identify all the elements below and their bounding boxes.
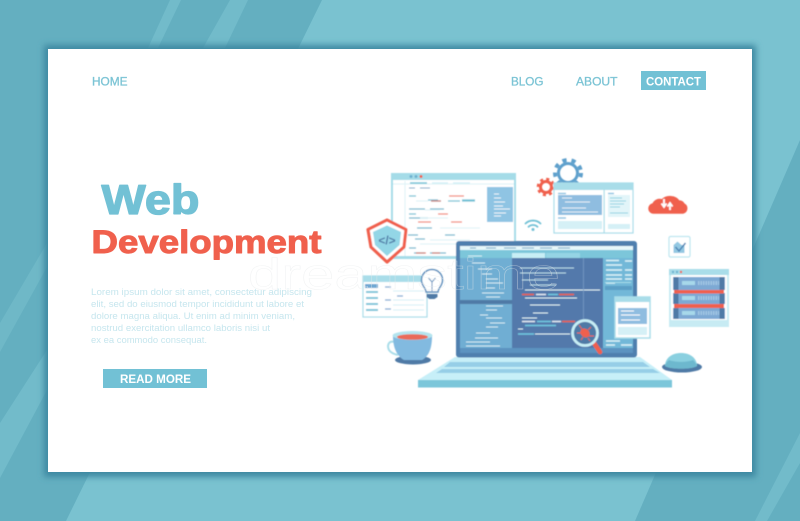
saucer: [395, 356, 431, 364]
icon: wifi: [526, 221, 540, 231]
right properties panel: [603, 258, 633, 348]
server rack window: [669, 269, 729, 327]
body text block: nostrud exercitation ullamco laboris nisi ut: [91, 323, 270, 334]
icon: blue gear: [555, 160, 581, 186]
icon: computer mouse: [662, 353, 702, 372]
body text block: dolore magna aliqua. Ut enim ad minim veniam,: [91, 311, 295, 322]
floating mini window: [615, 297, 650, 338]
body text block: [91, 287, 312, 346]
icon: coffee cup: [388, 331, 432, 364]
settings blue block: [558, 195, 602, 215]
browser bar: [460, 246, 633, 250]
icon: lightbulb: [422, 270, 442, 299]
nav: contact button: [641, 71, 706, 90]
code panel: [512, 258, 603, 348]
icon: cloud with sync arrows: [649, 197, 687, 213]
nav: about: ABOUT: [576, 76, 618, 88]
icon: checkbox: [669, 236, 690, 257]
small form window: [363, 276, 427, 317]
server units: [673, 277, 725, 319]
laptop: [418, 241, 672, 388]
icon: shield with code: </>: [378, 234, 396, 248]
body text block: ex ea commodo consequat.: [91, 335, 207, 346]
editor side panel: [487, 187, 513, 222]
icon: shield with code: [368, 220, 406, 262]
title: Development: Development: [92, 224, 322, 260]
read more button: READ MORE: [120, 374, 191, 386]
body text block: elit, sed do eiusmod tempor incididunt ut labore et: [91, 299, 304, 310]
body text block: Lorem ipsum dolor sit amet, consectetur adipiscing: [91, 287, 312, 298]
nav: contact button: CONTACT: [646, 76, 701, 88]
watermark: dreamstime: [248, 250, 560, 299]
icon: red gear: [538, 179, 554, 195]
web development illustration: [363, 160, 729, 388]
nav: home: HOME: [92, 76, 128, 88]
nav: blog: BLOG: [511, 76, 544, 88]
navigation bar: [92, 71, 706, 90]
title: Web: Web: [102, 176, 200, 223]
icon: magnifier with bug: [572, 320, 600, 352]
file tree panel: [460, 256, 512, 348]
settings window: [554, 183, 633, 233]
code editor window: [391, 173, 516, 259]
read more button: [103, 369, 207, 388]
white card panel: [48, 49, 752, 472]
laptop deck: [418, 357, 672, 388]
laptop screen bezel: [456, 241, 637, 358]
bug: [577, 325, 594, 341]
